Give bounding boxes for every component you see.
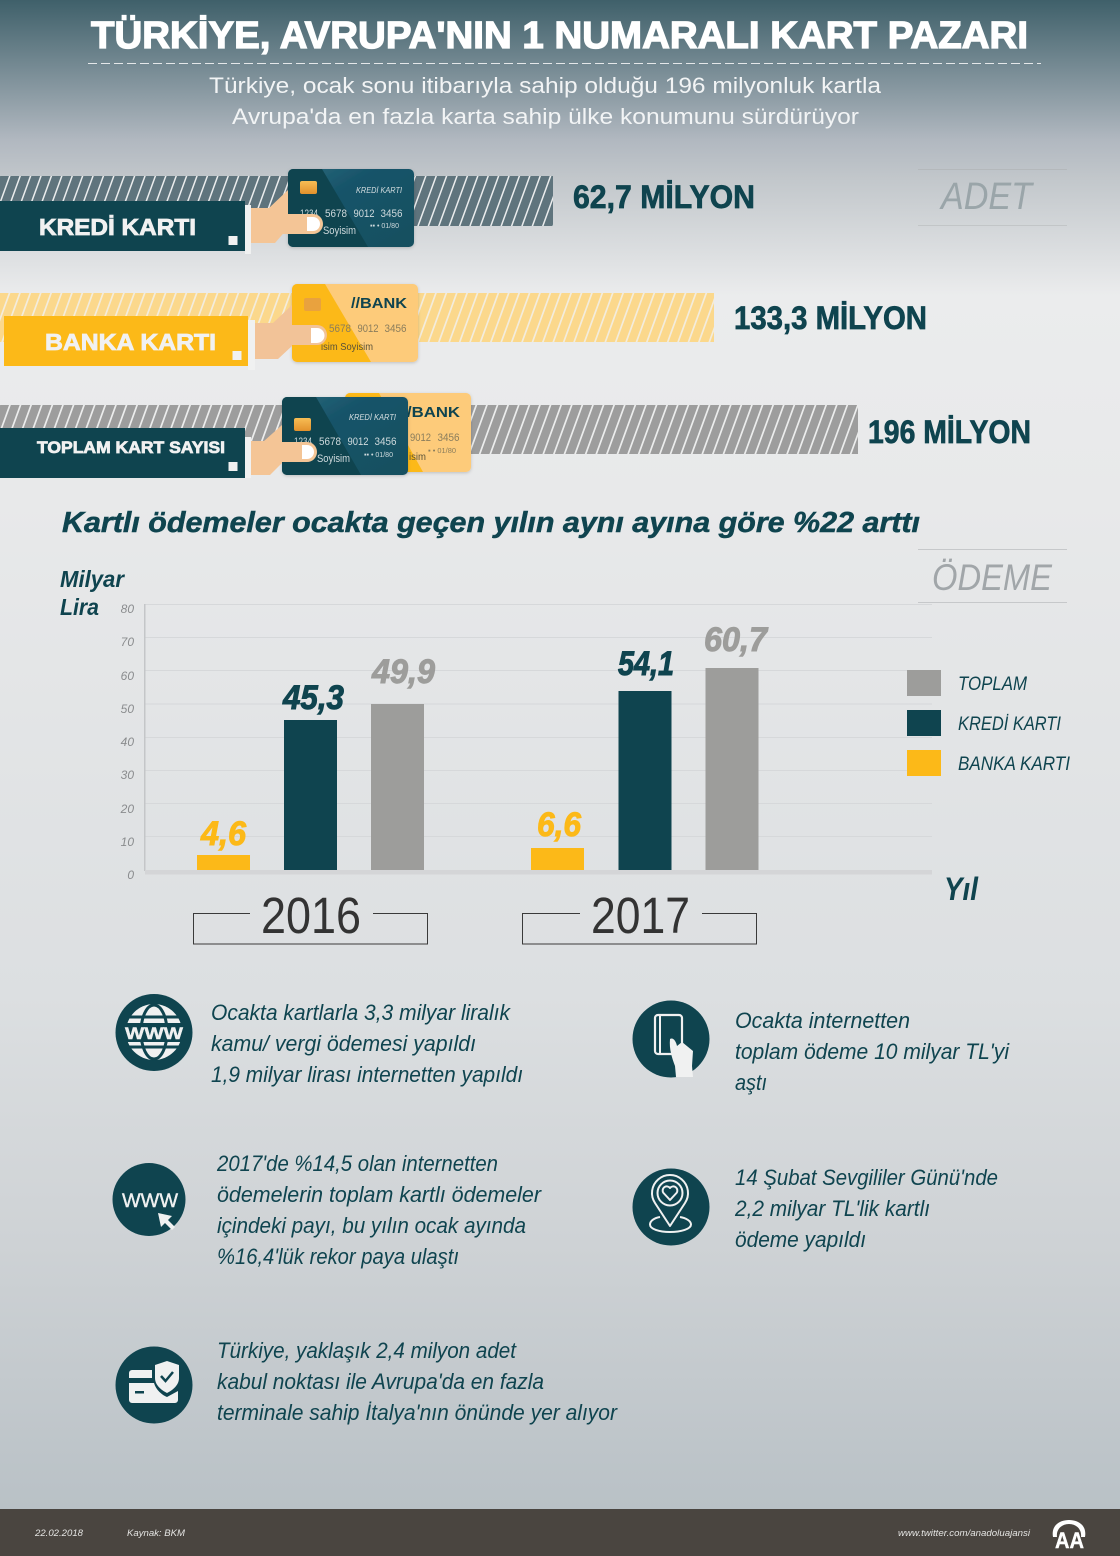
hand: [251, 425, 317, 475]
credit card: 3456: [380, 208, 402, 220]
credit card front: Soyisim: [317, 453, 350, 465]
subtitle: Türkiye, ocak sonu itibarıyla sahip olduğu 196 milyonluk kartla: [209, 73, 882, 98]
text: kamu vergi: [211, 1000, 523, 1087]
label: banka karti: BANKA KARTI: [45, 329, 216, 355]
logo: AA: AA: [1055, 1528, 1084, 1553]
icon: www cursor: WWW: [122, 1191, 178, 1212]
axis values: 70: [121, 635, 134, 649]
panel: toplam kart sayisi: [0, 393, 909, 478]
axis values: 10: [121, 835, 134, 849]
credit card: ▪▪ • 01/80: [370, 221, 399, 230]
credit card front: 1234: [294, 436, 312, 448]
text: internet payi: ödemelerin toplam kartlı ödemeler: [217, 1182, 543, 1207]
bars 2016: 49,9: [371, 653, 435, 691]
legend: KREDİ KARTI: [958, 714, 1062, 735]
legend: BANKA KARTI: [958, 754, 1071, 775]
title: TÜRKİYE, AVRUPA'NIN 1 NUMARALI KART PAZARI: [91, 14, 1028, 57]
icon: www cursor: [112, 1163, 186, 1236]
debit card: isim Soyisim: [321, 341, 373, 353]
text: sevgililer gunu: ödeme yapıldı: [735, 1227, 866, 1252]
text: sevgililer gunu: [734, 1165, 998, 1252]
hand: [255, 305, 327, 359]
legend: [907, 670, 1071, 776]
label: banka karti: [4, 316, 255, 370]
striped bar: toplam: [0, 405, 909, 454]
axis values: 40: [121, 735, 134, 749]
footer: www.twitter.com/anadoluajansi: [898, 1528, 1031, 1539]
tag: odeme: ÖDEME: [932, 557, 1053, 598]
subtitle: [209, 73, 882, 129]
debit card: //BANK: [351, 295, 407, 312]
credit card front: 5678: [319, 436, 341, 448]
tag: adet: ADET: [939, 176, 1034, 218]
text: sevgililer gunu: 14 Şubat Sevgililer Günü'nde: [735, 1165, 998, 1190]
credit card front: 9012: [348, 436, 368, 448]
debit card back: 3456: [438, 432, 460, 444]
icon: location heart: [632, 1168, 710, 1246]
year: 2016: 2016: [261, 887, 361, 944]
axis values: [120, 602, 134, 882]
label: toplam kart sayisi: TOPLAM KART SAYISI: [37, 438, 225, 457]
text: internetten toplam: toplam ödeme 10 milyar TL'yi: [735, 1039, 1010, 1064]
footer: 22.02.2018: [34, 1528, 84, 1539]
logo: AA: [1053, 1520, 1085, 1553]
year: 2016: [194, 887, 428, 944]
text: internet payi: 2017'de %14,5 olan internetten: [216, 1151, 498, 1176]
axis values: 60: [121, 669, 134, 683]
year: 2017: 2017: [591, 887, 690, 944]
label: kredi karti: KREDİ KARTI: [39, 214, 196, 240]
text: kabul noktasi: kabul noktası ile Avrupa'da en fazla: [217, 1369, 544, 1394]
value: banka karti: 133,3 MİLYON: [734, 300, 927, 336]
text: kamu vergi: kamu/ vergi ödemesi yapıldı: [211, 1031, 476, 1056]
panel: kredi karti: [0, 169, 609, 254]
debit card: [292, 284, 418, 362]
credit card: 1234: [300, 208, 318, 220]
axis title: milyar lira: Milyar: [60, 566, 125, 592]
debit card back: isim: [409, 451, 426, 463]
text: internetten toplam: Ocakta internetten: [735, 1008, 910, 1033]
heading: kartli odemeler: Kartlı ödemeler ocakta geçen yılın aynı ayına göre %22 arttı: [62, 507, 920, 539]
axis title: milyar lira: [60, 566, 125, 620]
value: toplam: 196 MİLYON: [868, 414, 1031, 450]
text: kamu vergi: 1,9 milyar lirası internetten yapıldı: [211, 1062, 523, 1087]
footer: Kaynak: BKM: [127, 1528, 185, 1539]
bars 2016: [197, 653, 435, 870]
axis title: yil: Yıl: [944, 871, 979, 907]
axis title: milyar lira: Lira: [60, 594, 99, 620]
icon: globe www: [116, 994, 192, 1071]
credit card: [288, 169, 414, 247]
bars 2017: 54,1: [618, 645, 674, 683]
axis values: 0: [127, 868, 134, 882]
debit card back: /BANK: [407, 404, 460, 421]
subtitle: Avrupa'da en fazla karta sahip ülke konumunu sürdürüyor: [232, 104, 859, 129]
credit card front: KREDİ KARTI: [349, 413, 397, 422]
text: internetten toplam: aştı: [735, 1070, 767, 1095]
text: sevgililer gunu: 2,2 milyar TL'lik kartlı: [734, 1196, 930, 1221]
axis values: 80: [121, 602, 134, 616]
icon: card in hand: [632, 1000, 710, 1078]
footer: [0, 1509, 1120, 1556]
credit card: 5678: [325, 208, 347, 220]
bar chart: [120, 602, 932, 882]
value: kredi karti: 62,7 MİLYON: [573, 179, 755, 215]
credit card front: ▪▪ • 01/80: [364, 450, 393, 459]
bars 2017: 6,6: [537, 806, 582, 844]
debit card: 9012: [358, 323, 378, 335]
label: kredi karti: [0, 201, 251, 254]
bars 2017: [531, 621, 769, 870]
credit card front: 3456: [374, 436, 396, 448]
axis values: 50: [121, 702, 134, 716]
credit card: Soyisim: [323, 225, 356, 237]
credit card: KREDİ KARTI: [356, 186, 403, 195]
debit card: 3456: [384, 323, 406, 335]
debit card back: 9012: [410, 432, 431, 444]
text: kabul noktasi: Türkiye, yaklaşık 2,4 milyon adet: [217, 1338, 517, 1363]
bars 2016: 45,3: [282, 679, 344, 717]
bars 2016: 4,6: [200, 815, 247, 853]
icon: card shield: [116, 1346, 192, 1424]
debit card: 5678: [329, 323, 351, 335]
axis values: 20: [120, 802, 134, 816]
text: internetten toplam: [735, 1008, 1010, 1095]
label: toplam kart sayisi: [0, 428, 251, 478]
panel: banka karti: [0, 284, 714, 366]
text: kamu vergi: Ocakta kartlarla 3,3 milyar liralık: [211, 1000, 511, 1025]
text: kabul noktasi: terminale sahip İtalya'nın önünde yer alıyor: [217, 1400, 619, 1425]
legend: TOPLAM: [958, 674, 1027, 695]
striped bar: kredi karti: [0, 176, 609, 226]
hand: [251, 190, 323, 243]
icon: globe www: WWW: [125, 1024, 184, 1043]
debit card back: ▪ • 01/80: [428, 446, 456, 455]
credit card: 9012: [354, 208, 374, 220]
debit card back: [345, 393, 471, 472]
text: kabul noktasi: [217, 1338, 619, 1425]
year: 2017: [522, 887, 756, 944]
bars 2017: 60,7: [704, 621, 769, 659]
text: internet payi: [216, 1151, 543, 1269]
credit card front: [282, 397, 408, 475]
text: internet payi: %16,4'lük rekor paya ulaştı: [217, 1244, 459, 1269]
striped bar: banka karti: [0, 293, 769, 342]
axis values: 30: [121, 768, 134, 782]
text: internet payi: içindeki payı, bu yılın ocak ayında: [217, 1213, 526, 1238]
